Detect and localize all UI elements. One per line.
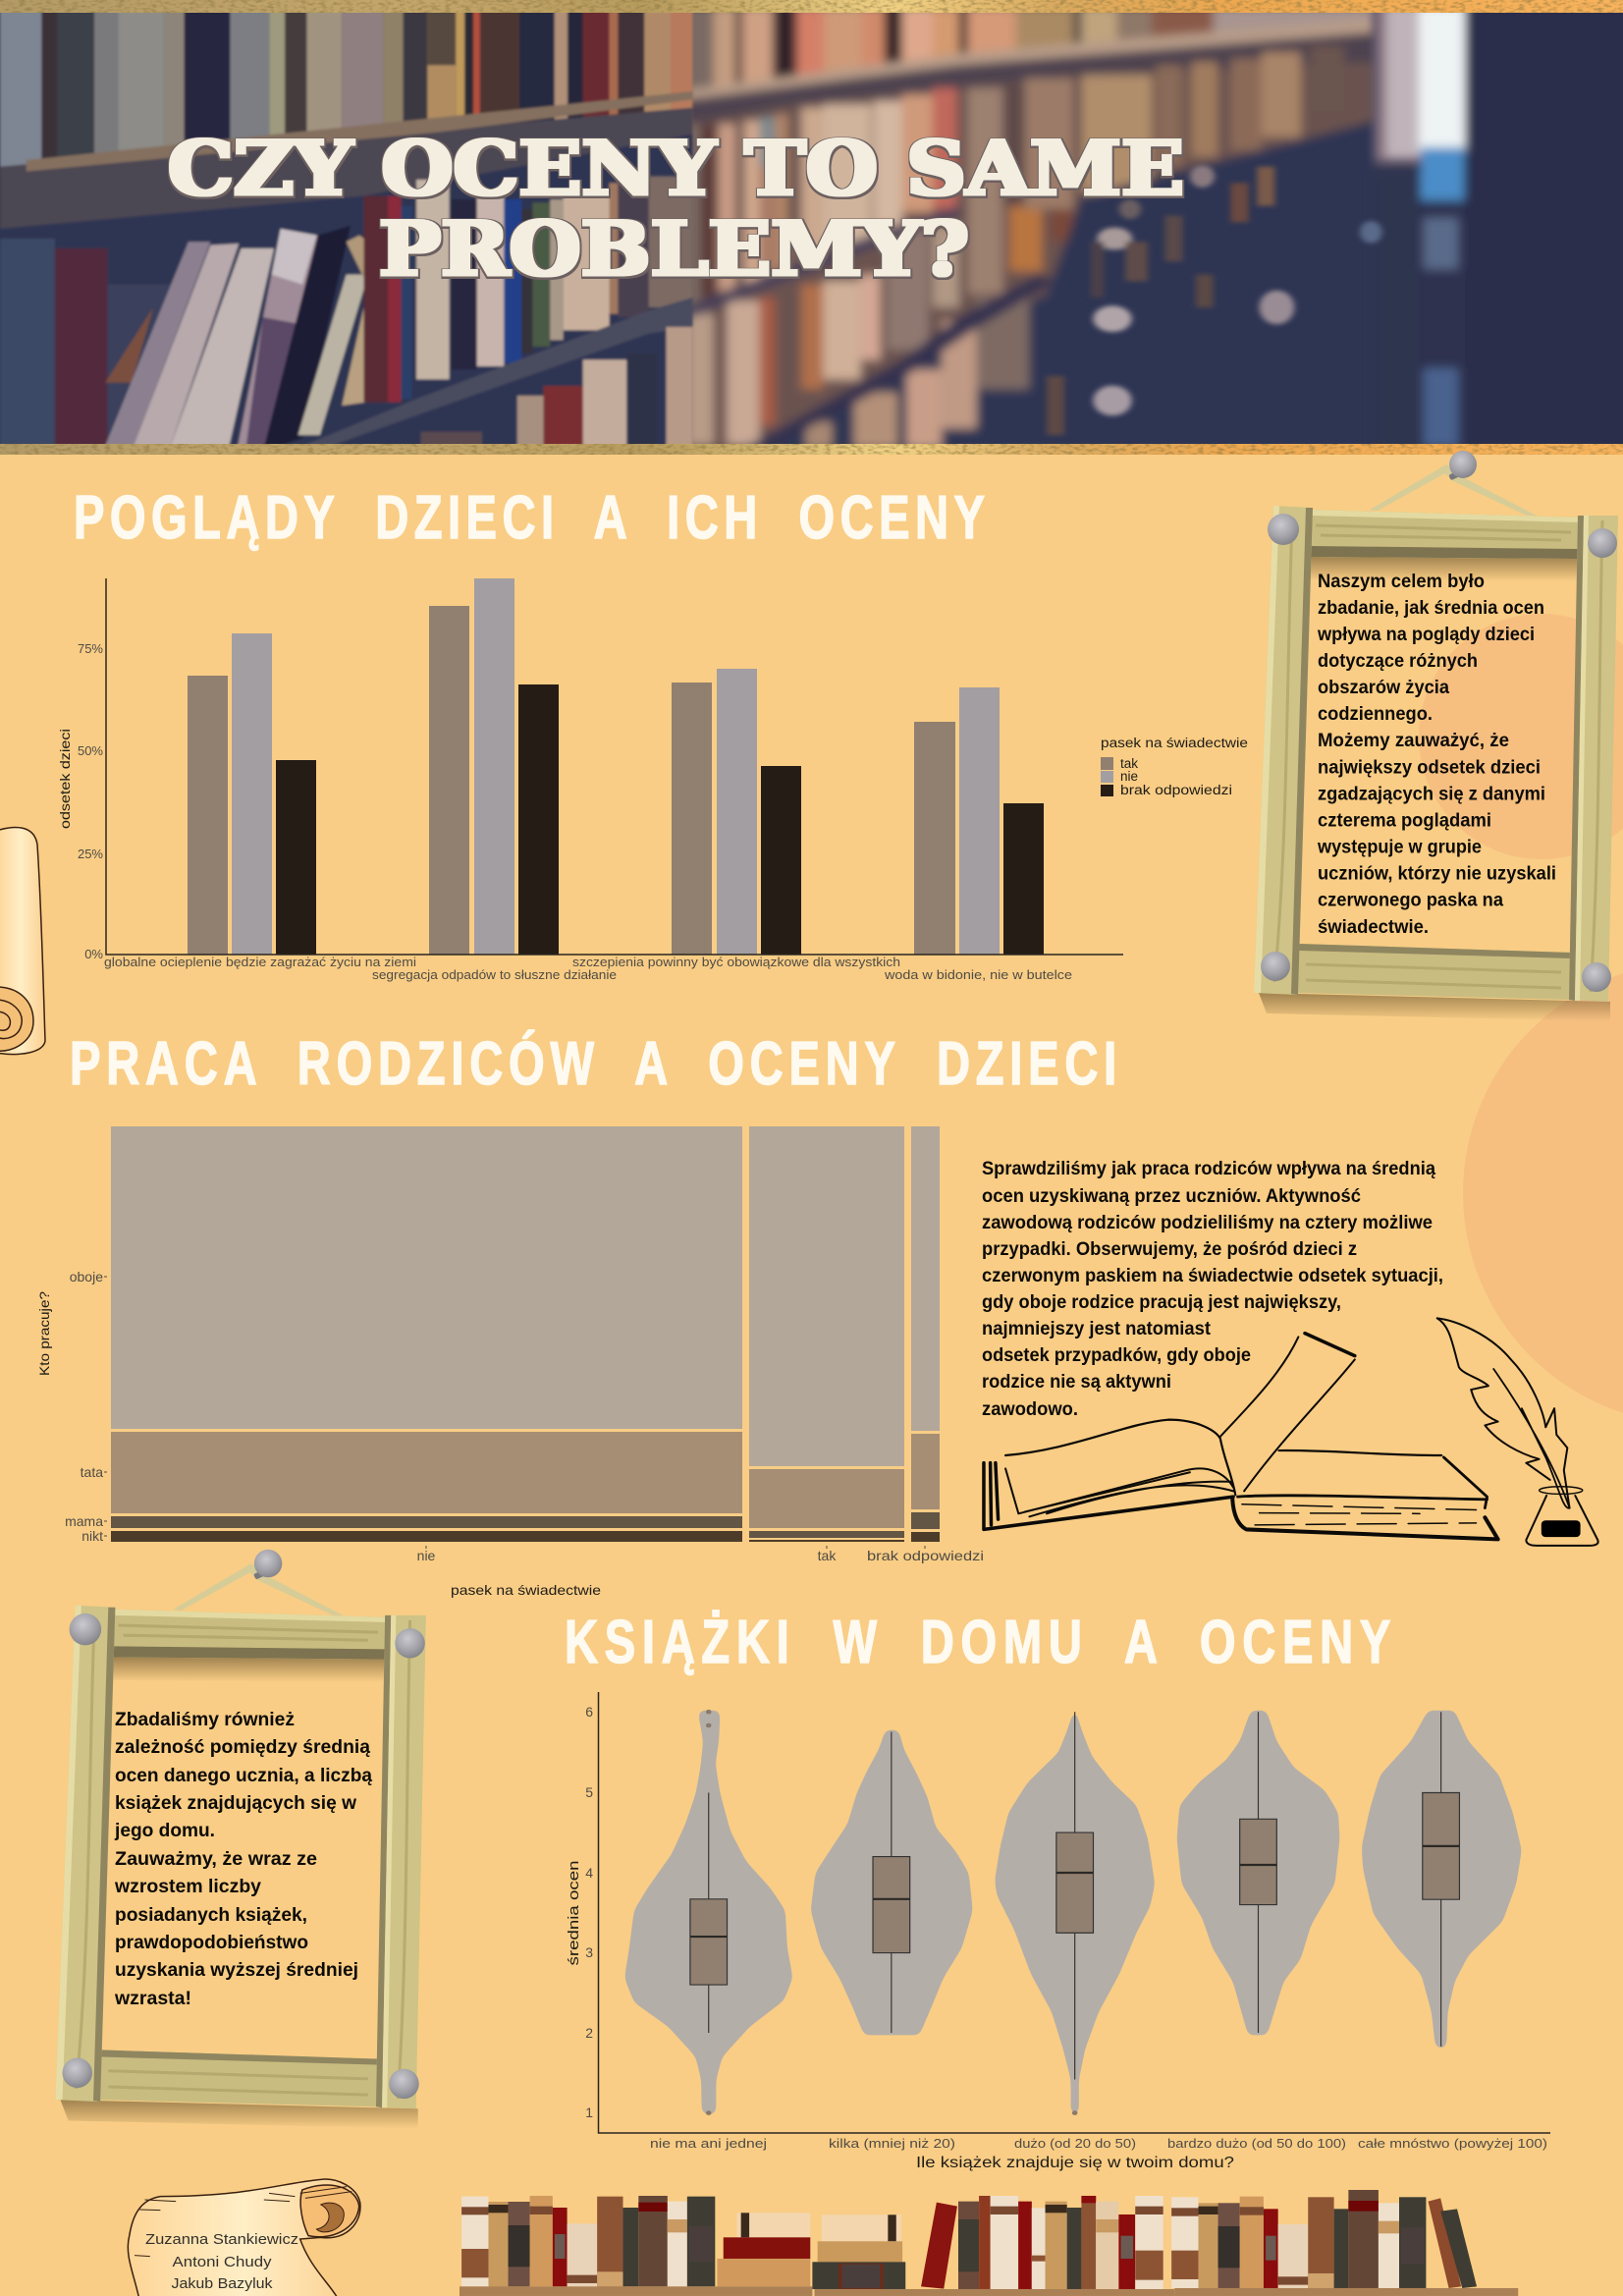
text block: parents' work: odsetek przypadków, gdy oboje xyxy=(982,1345,1251,1366)
title: CZY OCENY TO SAME xyxy=(168,125,1184,212)
bars group 4 xyxy=(914,687,1044,955)
violin: bardzo dużo xyxy=(1177,1711,1339,2035)
x labels: nie xyxy=(417,1548,436,1563)
icon: quill xyxy=(1437,1318,1570,1508)
bars group 1 xyxy=(188,633,316,955)
heading: książki w domu: KSIĄŻKI W DOMU A OCENY xyxy=(565,1608,1390,1676)
icon: parchment scroll left xyxy=(0,828,45,1055)
frame 2 text: jego domu. xyxy=(114,1821,215,1841)
decorative peach blob at right xyxy=(1463,962,1623,1424)
y axis title: Kto pracuje? xyxy=(36,1291,52,1376)
decorative peach blob behind top frame xyxy=(1419,614,1623,859)
bars group 2 xyxy=(429,578,559,955)
bars group 3 xyxy=(672,669,801,955)
legend: tak xyxy=(1120,756,1138,771)
authors: Jakub Bazyluk xyxy=(171,2275,273,2292)
icon: open book with quill and inkwell xyxy=(984,1318,1598,1546)
frame 2 text: wzrasta! xyxy=(114,1989,191,2009)
y ticks: 2 xyxy=(585,2025,593,2041)
frame 1 text: codziennego. xyxy=(1318,704,1433,725)
text block: parents' work: zawodową rodziców podzieliliśmy na cztery możliwe xyxy=(982,1213,1433,1233)
violin: kilka xyxy=(811,1730,973,2035)
x axis title: pasek na świadectwie xyxy=(451,1582,601,1598)
frame 2 with text xyxy=(55,1550,426,2129)
frame 2 text: posiadanych książek, xyxy=(115,1905,307,1926)
photo right section xyxy=(683,6,1375,452)
frame 1 text: Możemy zauważyć, że xyxy=(1318,731,1509,751)
icon: inkwell xyxy=(1526,1487,1598,1546)
frame 1 with text xyxy=(1254,451,1618,1021)
frame 1 text: największy odsetek dzieci xyxy=(1318,758,1541,778)
x axis labels: woda w bidonie, nie w butelce xyxy=(884,967,1072,982)
frame 2 text: Zauważmy, że wraz ze xyxy=(115,1849,317,1870)
text block: parents' work xyxy=(982,1159,1443,1420)
frame 2 text: zależność pomiędzy średnią xyxy=(115,1737,370,1758)
mosaic chart: parents' work xyxy=(36,1126,984,1598)
x axis labels: szczepienia powinny być obowiązkowe dla wszystkich xyxy=(572,955,900,969)
y labels: nikt xyxy=(81,1528,103,1544)
x labels: tak xyxy=(818,1548,837,1563)
y ticks: 6 xyxy=(585,1704,593,1720)
frame 1 text: czerwonego paska na xyxy=(1318,891,1503,911)
photo bokeh highlights xyxy=(1047,165,1382,435)
frame 2 text xyxy=(114,1710,372,2009)
legend: nie xyxy=(1120,769,1138,784)
frame 1 text: obszarów życia xyxy=(1318,678,1449,698)
y ticks: 1 xyxy=(585,2105,593,2120)
frame 1 text: występuje w grupie xyxy=(1317,838,1482,858)
x labels: kilka (mniej niż 20) xyxy=(829,2136,955,2151)
x labels: bardzo dużo (od 50 do 100) xyxy=(1167,2136,1346,2151)
legend xyxy=(1101,736,1248,797)
y labels: tata xyxy=(81,1464,103,1480)
text block: parents' work: zawodowo. xyxy=(982,1399,1078,1420)
frame 2 text: prawdopodobieństwo xyxy=(115,1933,308,1953)
photo blurred far right xyxy=(1369,13,1475,444)
frame 2 text: książek znajdujących się w xyxy=(115,1793,356,1814)
x labels: całe mnóstwo (powyżej 100) xyxy=(1358,2136,1547,2151)
heading: poglądy dzieci: POGLĄDY DZIECI A ICH OCENY xyxy=(74,483,985,552)
violin: całe mnóstwo xyxy=(1362,1711,1522,2048)
legend: brak odpowiedzi xyxy=(1120,783,1232,797)
violin chart: books at home xyxy=(566,1692,1550,2171)
y axis ticks: 0% xyxy=(84,947,103,961)
x labels xyxy=(417,1548,984,1563)
text block: parents' work: Sprawdziliśmy jak praca rodziców wpływa na średnią xyxy=(982,1159,1435,1179)
header: gold bands and bookshelf photo xyxy=(0,0,1623,457)
frame 1 text: Naszym celem było xyxy=(1318,572,1485,592)
photo left section xyxy=(0,6,692,452)
frame 1 text: czterema poglądami xyxy=(1318,811,1491,831)
axis titles: średnia ocen xyxy=(566,1860,582,1966)
x axis labels xyxy=(104,955,1072,982)
frame 2 text: Zbadaliśmy również xyxy=(115,1710,295,1730)
title: PROBLEMY? xyxy=(379,205,969,293)
authors: Zuzanna Stankiewicz xyxy=(145,2231,298,2248)
y labels xyxy=(65,1269,103,1544)
frame 1 text: świadectwie. xyxy=(1318,917,1429,938)
frame 1 text: wpływa na poglądy dzieci xyxy=(1317,625,1535,645)
frame 1 text xyxy=(1317,572,1556,938)
violin: dużo xyxy=(995,1708,1155,2115)
y labels: mama xyxy=(65,1513,103,1529)
y ticks: 4 xyxy=(585,1865,593,1881)
y axis ticks: 75% xyxy=(78,641,103,656)
y axis title: odsetek dzieci xyxy=(57,729,73,829)
y ticks: 5 xyxy=(585,1784,593,1800)
title xyxy=(168,125,1184,293)
icon: parchment scroll with authors xyxy=(128,2179,360,2296)
frame 2 text: uzyskania wyższej średniej xyxy=(115,1960,358,1981)
heading: praca rodziców: PRACA RODZICÓW A OCENY DZIECI xyxy=(70,1029,1116,1098)
x axis labels: segregacja odpadów to słuszne działanie xyxy=(372,967,617,982)
axis titles: Ile książek znajduje się w twoim domu? xyxy=(916,2155,1234,2171)
column: nie xyxy=(111,1126,742,1542)
frame 2 text: ocen danego ucznia, a liczbą xyxy=(115,1766,372,1786)
column: brak odpowiedzi xyxy=(911,1126,940,1542)
legend: pasek na świadectwie xyxy=(1101,736,1248,750)
text block: parents' work: ocen uzyskiwaną przez uczniów. Aktywność xyxy=(982,1186,1361,1207)
x labels: dużo (od 20 do 50) xyxy=(1014,2136,1136,2151)
x labels: nie ma ani jednej xyxy=(650,2136,767,2151)
authors xyxy=(145,2231,298,2292)
column: tak xyxy=(749,1126,904,1542)
icon: row of books on shelf xyxy=(460,2190,1518,2296)
icon: open book xyxy=(984,1334,1498,1539)
y labels: oboje xyxy=(70,1269,103,1285)
y axis ticks: 25% xyxy=(78,847,103,861)
text block: parents' work: najmniejszy jest natomiast xyxy=(982,1319,1212,1339)
text block: parents' work: przypadki. Obserwujemy, że pośród dzieci z xyxy=(982,1239,1357,1260)
frame 1 text: zgadzających się z danymi xyxy=(1318,784,1545,805)
frame 1 text: zbadanie, jak średnia ocen xyxy=(1318,598,1544,619)
y axis ticks: 50% xyxy=(78,743,103,758)
frame 2 text: wzrostem liczby xyxy=(114,1877,261,1897)
frame 1 text: uczniów, którzy nie uzyskali xyxy=(1318,864,1556,885)
text block: parents' work: rodzice nie są aktywni xyxy=(982,1372,1171,1393)
x labels: brak odpowiedzi xyxy=(867,1548,984,1563)
bar chart: views by grades xyxy=(57,578,1248,982)
y ticks xyxy=(585,1704,593,2120)
y ticks: 3 xyxy=(585,1944,593,1960)
frame 1 text: dotyczące różnych xyxy=(1318,651,1478,672)
x axis labels: globalne ocieplenie będzie zagrażać życiu na ziemi xyxy=(104,955,416,969)
x labels xyxy=(650,2136,1547,2151)
y axis ticks xyxy=(78,641,103,961)
text block: parents' work: gdy oboje rodzice pracują jest największy, xyxy=(982,1292,1341,1313)
text block: parents' work: czerwonym paskiem na świadectwie odsetek sytuacji, xyxy=(982,1266,1443,1286)
violin: nie ma ani jednej xyxy=(624,1710,792,2115)
axis titles xyxy=(566,1860,1234,2171)
authors: Antoni Chudy xyxy=(173,2254,272,2270)
